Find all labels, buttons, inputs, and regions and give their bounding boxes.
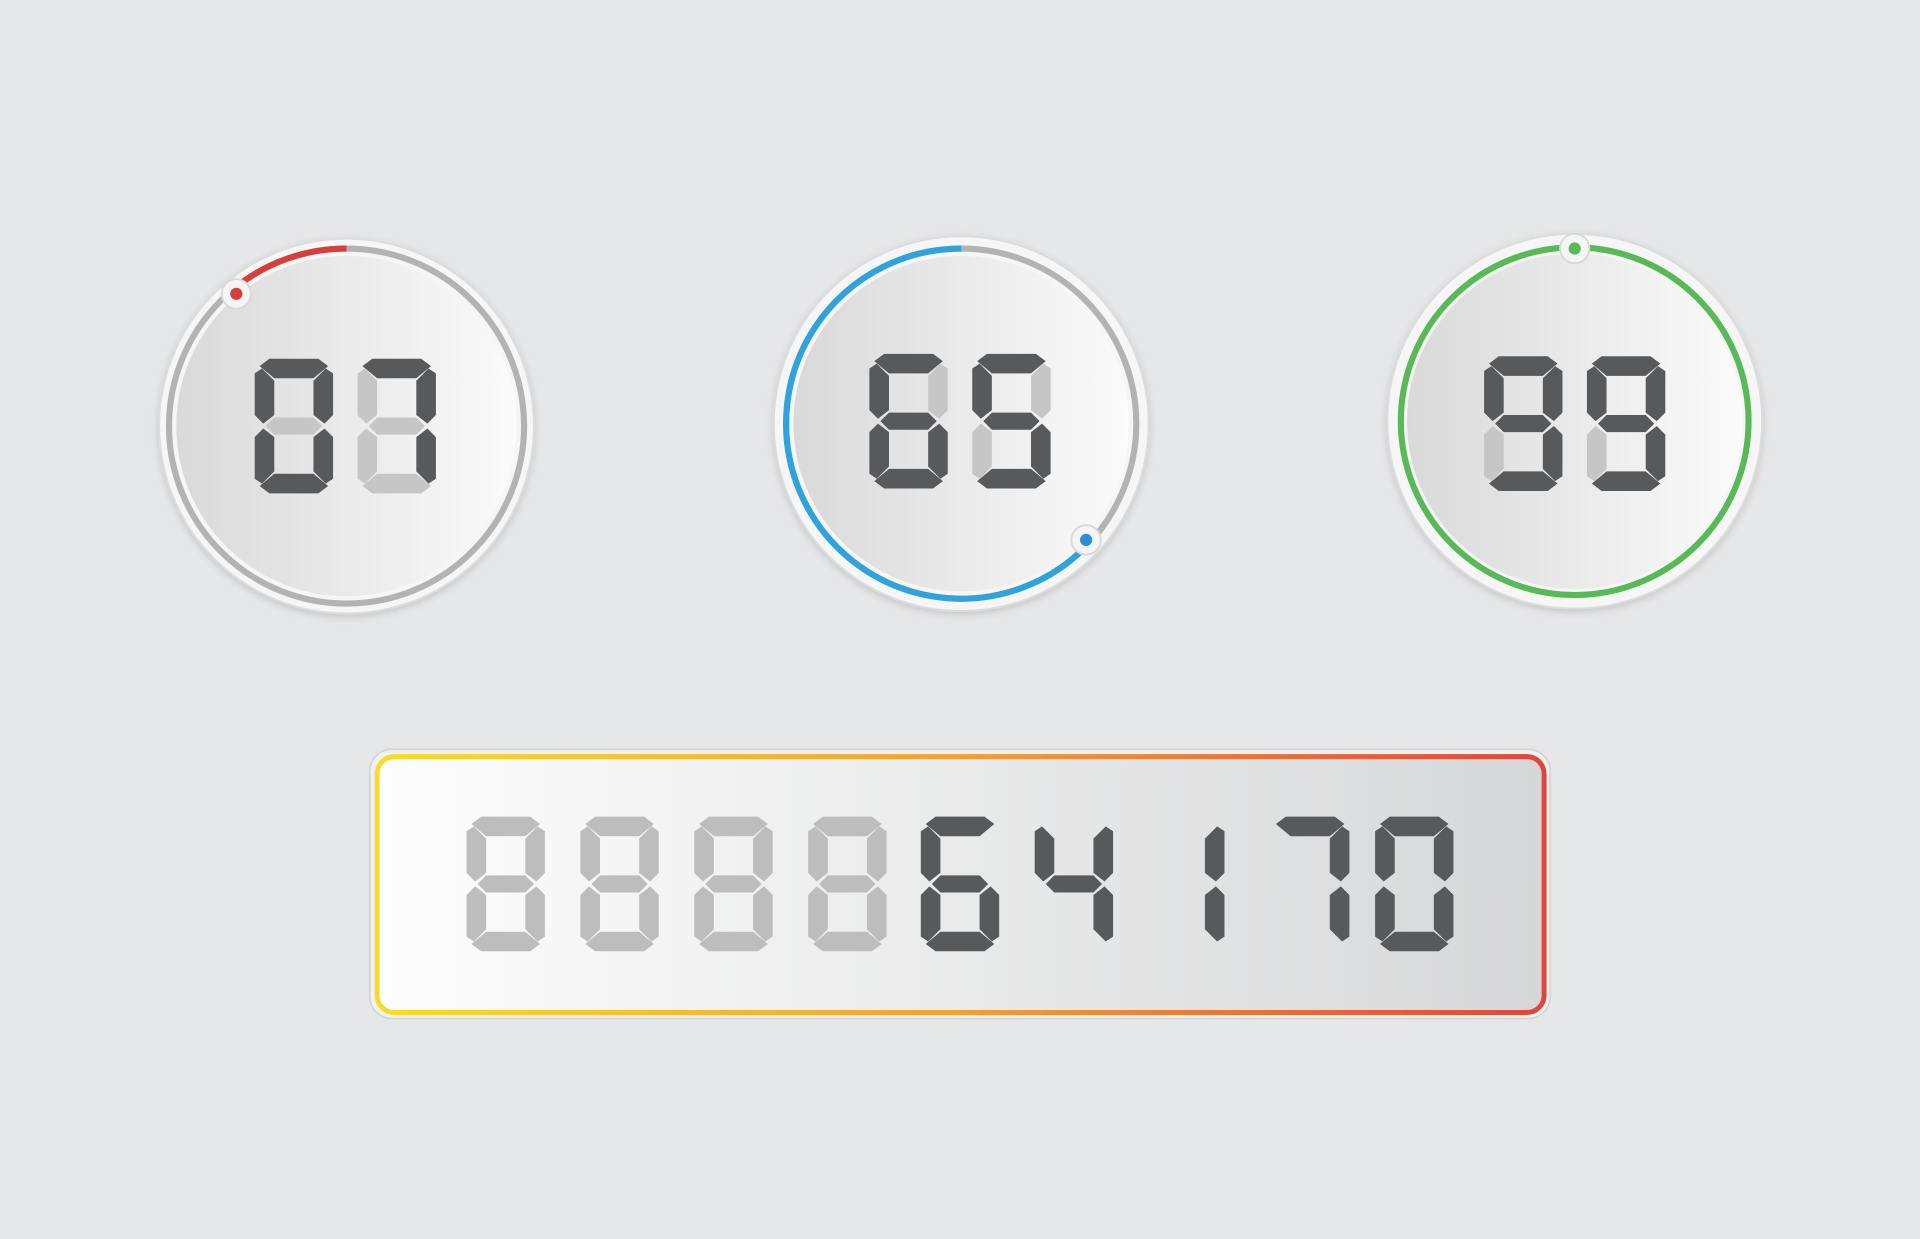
green progress ring: [1401, 247, 1749, 595]
digits 65: [869, 354, 1051, 488]
digits 99: [1484, 356, 1665, 491]
red knob: [222, 279, 251, 309]
blue knob: [1071, 525, 1101, 555]
red progress arc: [234, 249, 347, 289]
dial 2: blue: [774, 236, 1149, 611]
blue progress arc: [786, 249, 1089, 599]
dial 3: green: [1387, 234, 1762, 608]
green knob: [1560, 234, 1589, 263]
counter digits 88886 4 170: [467, 817, 1453, 951]
digits 07: [255, 359, 436, 493]
counter panel: [370, 749, 1550, 1019]
dial 1: red: [159, 239, 534, 613]
